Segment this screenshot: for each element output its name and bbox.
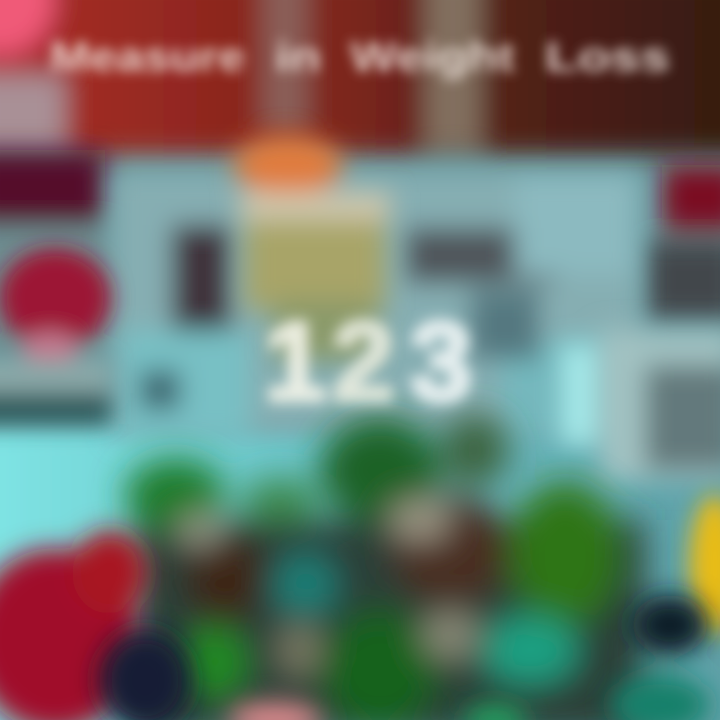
title: Weight bbox=[350, 33, 515, 80]
panel: red wall backdrop bbox=[0, 0, 720, 155]
panel: salad of greens and nuts bbox=[125, 414, 645, 720]
icon: blueberry bbox=[99, 630, 191, 720]
title: in bbox=[275, 33, 321, 80]
panel: tabletop bbox=[0, 425, 720, 720]
title bbox=[50, 33, 670, 80]
numbers: 1 2 3 bbox=[264, 299, 472, 424]
title: Loss bbox=[545, 33, 670, 80]
panel: lower right garnish bbox=[227, 595, 710, 720]
panel: upper shadows beside glasses bbox=[0, 150, 720, 358]
numbers: 1 2 3: 3 bbox=[410, 299, 472, 424]
icon: raspberry at left bbox=[0, 248, 111, 424]
panel: centre glass with juice bbox=[233, 135, 390, 360]
panel: water glasses bbox=[112, 172, 640, 440]
icon: red apple bbox=[0, 530, 148, 720]
numbers: 1 2 3: 2 bbox=[332, 299, 394, 424]
numbers: 1 2 3: 1 bbox=[264, 299, 326, 424]
icon: lemon bbox=[690, 495, 720, 635]
title: Measure bbox=[50, 33, 245, 80]
icon: right water glass bbox=[562, 330, 720, 480]
